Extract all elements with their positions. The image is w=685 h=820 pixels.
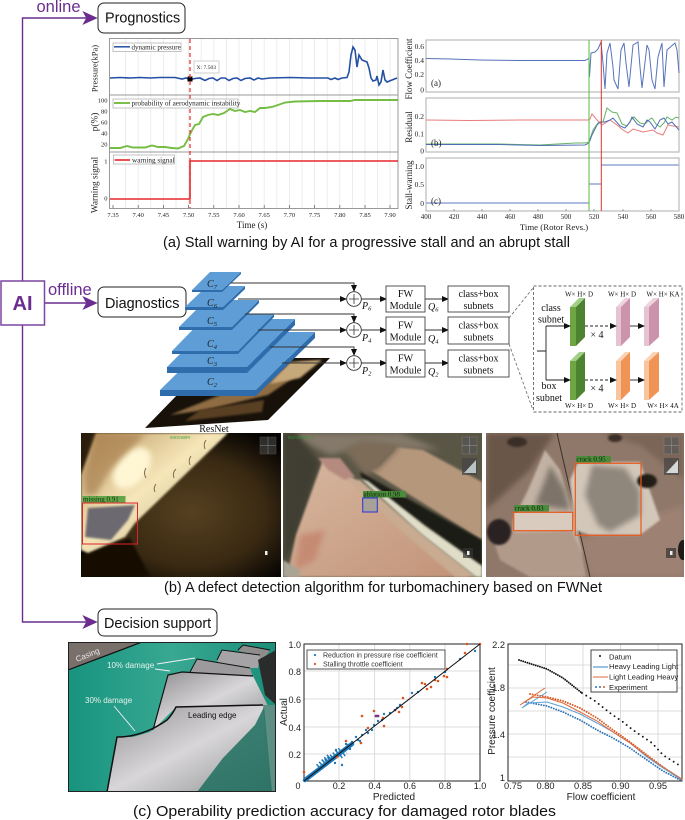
y axis ticks and titles xyxy=(404,38,424,210)
subnet labels: subnet xyxy=(536,393,562,404)
axis labels: 0.8 xyxy=(288,667,301,677)
layer C3: 3 xyxy=(213,361,218,368)
label: ResNet: ResNet xyxy=(199,424,229,435)
y axis ticks and titles: Residual xyxy=(404,111,414,143)
x axis ticks: 560 xyxy=(646,213,657,221)
y axis labels: Warning signal xyxy=(90,156,100,213)
arrows between modules xyxy=(361,299,448,363)
photo: damaged rotor blades xyxy=(68,642,276,792)
FW module boxes: FW xyxy=(398,289,414,300)
x axis ticks: 7.60 xyxy=(233,212,245,219)
caption (a): (a) Stall warning by AI for a progressive stall and an abrupt stall xyxy=(163,235,570,251)
camera UI marks xyxy=(288,435,477,558)
y axis ticks and titles: 0.4 xyxy=(415,56,424,65)
sum node P2 xyxy=(347,356,372,378)
dimension labels: W× H× D xyxy=(608,402,636,410)
x axis ticks: 580 xyxy=(674,213,685,221)
x axis ticks: 7.50 xyxy=(183,212,194,219)
subnet boxes: class+box xyxy=(458,289,499,300)
y axis ticks and titles: 1.0 xyxy=(415,162,424,171)
x axis ticks: 440 xyxy=(477,213,488,221)
photo annotations: 10% damage xyxy=(107,661,155,670)
panel letters xyxy=(431,78,442,206)
axis labels: Actual xyxy=(279,698,290,726)
Q labels: Q xyxy=(428,367,435,378)
line: warning signal xyxy=(110,161,398,199)
line: flow coefficient xyxy=(426,42,679,89)
axis labels: Flow coefficient xyxy=(567,792,636,803)
layer C5: 5 xyxy=(214,321,218,328)
diagram: connector lines from pyramid xyxy=(231,283,354,363)
photo annotations: Casing xyxy=(74,646,101,664)
axis labels: 0.90 xyxy=(611,781,630,791)
branch arrows xyxy=(537,326,644,380)
y axis labels: 60 xyxy=(101,120,108,126)
chart: abrupt stall time traces xyxy=(404,38,685,232)
FW module boxes: Module xyxy=(390,366,422,376)
x axis ticks: 7.55 xyxy=(208,212,219,219)
curves legend: Heavy Leading Light xyxy=(609,662,679,671)
AI box: AI xyxy=(12,293,32,315)
camera UI marks xyxy=(664,437,679,558)
sum node P4: P xyxy=(362,333,368,344)
dimension labels xyxy=(565,290,680,410)
y axis ticks and titles: 0.1 xyxy=(415,130,424,138)
heading: Diagnostics xyxy=(98,287,186,317)
axis labels: 0.2 xyxy=(333,781,345,791)
axis labels: 0.4 xyxy=(288,723,301,733)
sum node P4: 4 xyxy=(368,338,372,344)
detection box: crack 0.83 xyxy=(514,504,573,531)
curve: Heavy Leading Light xyxy=(522,692,682,780)
layer C4 xyxy=(172,314,274,354)
x axis ticks: 420 xyxy=(449,213,460,221)
Q labels xyxy=(428,302,439,378)
layer C2: 2 xyxy=(214,382,218,389)
subnet boxes xyxy=(448,286,509,377)
axis labels: 0 xyxy=(295,781,301,791)
label: offline: offline xyxy=(48,281,92,299)
legend: warning signal xyxy=(114,155,175,164)
heading: Prognostics: Prognostics xyxy=(105,10,180,26)
y axis ticks and titles: 0 xyxy=(420,199,424,208)
photo: missing defect xyxy=(81,433,281,577)
layer C6: C xyxy=(207,298,214,309)
dimension labels: W× H× D xyxy=(608,290,636,298)
axis labels xyxy=(487,640,667,803)
chart: progressive stall time traces xyxy=(90,38,398,230)
detection box: crack 0.95 xyxy=(575,456,641,535)
curves legend: Datum xyxy=(609,652,631,662)
y axis ticks and titles: 0.2 xyxy=(415,112,424,121)
y axis ticks and titles: 0 xyxy=(420,86,424,94)
orange feature blocks xyxy=(616,352,659,400)
curves legend: Experiment xyxy=(609,683,648,692)
y axis ticks and titles: 0.2 xyxy=(415,70,424,79)
legend: probability: probability of aerodynamic instability xyxy=(132,100,241,108)
curves legend: Light Leading Heavy xyxy=(609,672,678,682)
detection box: crack 0.83: crack 0.83 xyxy=(514,504,544,512)
line: instability probability xyxy=(110,100,398,148)
layer C6 xyxy=(185,286,245,310)
diagram: feature pyramid xyxy=(160,272,315,396)
axis labels: 1 xyxy=(500,773,505,783)
x axis ticks: 7.90 xyxy=(384,212,396,219)
marker: warning onset xyxy=(188,76,192,82)
axis labels: 2.2 xyxy=(492,640,505,650)
subnet labels: × 4 xyxy=(590,330,604,341)
diagram: FW modules and subnets xyxy=(347,286,509,378)
photo: crack defects xyxy=(486,433,685,577)
x axis ticks: 500 xyxy=(561,213,572,221)
axis labels: 0.8 xyxy=(439,781,451,791)
axis labels: 0.95 xyxy=(649,781,667,791)
x axis ticks: 520 xyxy=(589,213,600,221)
subnet labels: subnet xyxy=(538,314,564,326)
heading: Diagnostics: Diagnostics xyxy=(105,296,179,312)
subnet boxes: subnets xyxy=(464,366,494,376)
dimension labels: W× H× D xyxy=(565,402,593,410)
callout: X value: X: 7.503 xyxy=(196,65,216,71)
panel letters: (c) xyxy=(431,196,441,206)
panel letters: (b) xyxy=(431,138,442,148)
axis labels: 1.8 xyxy=(492,683,505,693)
dimension labels: W× H× KA xyxy=(646,290,680,298)
x axis ticks: 480 xyxy=(533,213,544,221)
y axis ticks and titles: Flow Coefficient xyxy=(404,38,414,100)
curves legend xyxy=(591,650,679,692)
callout: X value xyxy=(194,61,219,73)
y axis labels: 1 xyxy=(104,158,108,166)
x axis ticks: 7.70 xyxy=(284,212,295,219)
y axis ticks and titles: Stall-warning xyxy=(404,160,414,210)
green feature block box xyxy=(570,352,585,400)
scatter legend: Stalling throttle coefficient xyxy=(323,662,403,668)
identity line xyxy=(304,644,480,781)
detection box: ablation xyxy=(363,490,406,512)
y axis labels: 20 xyxy=(101,142,108,148)
subnet boxes: subnets xyxy=(464,301,494,312)
y axis ticks and titles: 0.5 xyxy=(415,180,424,189)
pink feature blocks xyxy=(616,298,659,346)
layer C3 xyxy=(167,319,295,373)
legend: dynamic pressure xyxy=(113,43,181,52)
axis labels: Pressure coefficient xyxy=(487,667,498,755)
scatter legend: Reduction in pressure rise coefficient xyxy=(323,652,438,660)
caption (b): (b) A defect detection algorithm for turbomachinery based on FWNet xyxy=(164,580,602,596)
axis labels: 1.0 xyxy=(288,640,301,650)
subnet boxes: class+box xyxy=(458,320,499,332)
axis labels: 0.4 xyxy=(368,781,381,791)
axis labels xyxy=(279,640,486,803)
line: dynamic pressure xyxy=(110,47,397,85)
axis labels: 0.6 xyxy=(404,781,416,791)
FW module boxes xyxy=(386,286,425,377)
detection box: missing xyxy=(82,496,138,544)
photo annotations: 30% damage xyxy=(85,696,133,705)
line: residual blue xyxy=(426,117,679,146)
layer C7 xyxy=(192,272,241,292)
x axis ticks: 460 xyxy=(505,213,516,221)
legend: dynamic pressure: dynamic pressure xyxy=(132,44,181,52)
x axis ticks: 400 xyxy=(421,213,432,221)
line: residual green xyxy=(426,108,679,145)
sum node P6: P xyxy=(362,301,368,312)
layer C4: 4 xyxy=(214,344,218,351)
FW module boxes: FW xyxy=(398,354,414,364)
axis labels: 1.0 xyxy=(474,781,486,791)
diagram: ResNet input image xyxy=(145,358,330,428)
axis labels: 0.2 xyxy=(288,750,301,760)
subnet boxes: class+box xyxy=(458,354,499,364)
x axis ticks: 7.40 xyxy=(133,212,144,219)
x axis ticks: 7.80 xyxy=(334,212,345,219)
x axis ticks: 7.85 xyxy=(359,212,371,219)
chart: pressure coefficient curves xyxy=(487,640,682,803)
diagram: subnet detail xyxy=(509,286,682,412)
axis labels: 0.6 xyxy=(288,695,301,705)
axis labels: 0.75 xyxy=(504,781,522,791)
y axis labels: 100 xyxy=(98,98,108,104)
points: experiment blue xyxy=(526,702,682,781)
x axis title: Time (s) xyxy=(237,220,267,230)
points: overlap xyxy=(375,709,396,717)
x axis ticks xyxy=(107,212,396,219)
axis labels: 1.4 xyxy=(492,730,505,740)
y axis ticks and titles: 0 xyxy=(420,146,424,156)
x axis ticks: 7.45 xyxy=(158,212,169,219)
dimension labels: W× H× 4A xyxy=(647,402,679,410)
panel letters: (a) xyxy=(431,78,441,88)
chart: predicted vs actual scatter xyxy=(279,640,486,803)
Q labels: Q xyxy=(428,334,435,345)
axis labels: 0.85 xyxy=(574,781,592,791)
layer C6: 6 xyxy=(214,303,218,310)
sum node P6 xyxy=(347,292,372,312)
points: stalling throttle xyxy=(303,643,481,773)
detection box: missing: missing 0.91 xyxy=(83,496,119,504)
y axis labels: Pressure(kPa) xyxy=(90,45,100,92)
layer C5: C xyxy=(207,316,214,327)
points: datum xyxy=(519,660,682,767)
green feature block class xyxy=(570,298,585,346)
layer C7: C xyxy=(207,279,214,290)
layer C7: 7 xyxy=(214,284,218,291)
points: experiment orange xyxy=(530,694,682,780)
subnet labels: × 4 xyxy=(590,384,604,394)
Q labels: Q xyxy=(428,302,435,313)
photo: ablation defect xyxy=(283,433,482,577)
points: reduction in pressure rise xyxy=(305,650,476,780)
heading: Decision support xyxy=(98,609,217,636)
camera UI marks: 65835308F9 xyxy=(170,435,190,440)
layer C2 xyxy=(160,332,315,396)
FW module boxes: FW xyxy=(398,320,414,332)
caption (c): (c) Operability prediction accuracy for damaged rotor blades xyxy=(133,804,556,820)
y axis labels: 40 xyxy=(101,130,108,138)
x axis ticks: 7.65 xyxy=(259,212,270,219)
x axis ticks xyxy=(421,213,685,221)
subnet labels: class xyxy=(541,303,561,314)
subnet labels: box xyxy=(542,381,556,392)
sum node P2: P xyxy=(362,366,368,377)
legend: warning signal: warning signal xyxy=(132,156,175,164)
camera UI marks xyxy=(170,435,276,555)
x axis ticks: 540 xyxy=(618,213,629,221)
layer C5 xyxy=(179,300,259,330)
heading: Prognostics xyxy=(98,3,185,33)
Q labels: 2 xyxy=(435,372,439,378)
line: stall onset time xyxy=(189,39,191,208)
axis labels: 0.80 xyxy=(536,781,555,791)
axis labels: Predicted xyxy=(373,792,415,803)
y axis labels xyxy=(90,45,108,213)
curve: Light Leading Heavy xyxy=(520,688,682,779)
camera UI marks: 80472118F8.13 xyxy=(288,435,313,440)
AI box xyxy=(1,281,44,325)
marker lines: warning and stall xyxy=(588,40,590,211)
layer C4: C xyxy=(207,339,214,350)
line: residual red xyxy=(426,114,679,135)
y axis ticks and titles: 0.6 xyxy=(415,42,424,51)
y axis labels: 0 xyxy=(104,196,108,202)
detection box: ablation: ablation 0.98 xyxy=(364,490,401,498)
sum node P2: 2 xyxy=(368,370,372,378)
x axis ticks: 7.75 xyxy=(309,212,320,219)
sum node P4 xyxy=(347,323,372,344)
heading: Decision support: Decision support xyxy=(104,616,211,632)
photo annotations xyxy=(74,646,237,731)
Q labels: 6 xyxy=(435,306,439,314)
y axis labels: p(%) xyxy=(90,113,100,131)
subnet boxes: subnets xyxy=(464,332,494,344)
Q labels: 4 xyxy=(435,338,439,346)
x axis ticks: 7.35 xyxy=(107,212,119,219)
FW module boxes: Module xyxy=(390,332,422,344)
subnet labels xyxy=(536,303,604,404)
AI branching connector xyxy=(22,12,96,628)
FW module boxes: Module xyxy=(390,301,422,312)
layer C2: C xyxy=(207,377,214,388)
photo annotations: Leading edge xyxy=(188,711,237,720)
layer C3: C xyxy=(207,356,214,367)
y axis labels: 80 xyxy=(101,108,108,116)
line: stall warning xyxy=(426,165,679,203)
sum node P6: 6 xyxy=(368,306,372,312)
scatter legend xyxy=(307,650,445,669)
x axis title: Time (Rotor Revs.) xyxy=(520,222,588,232)
dimension labels: W× H× D xyxy=(565,290,593,298)
detection box: crack 0.95: crack 0.95 xyxy=(576,456,606,464)
